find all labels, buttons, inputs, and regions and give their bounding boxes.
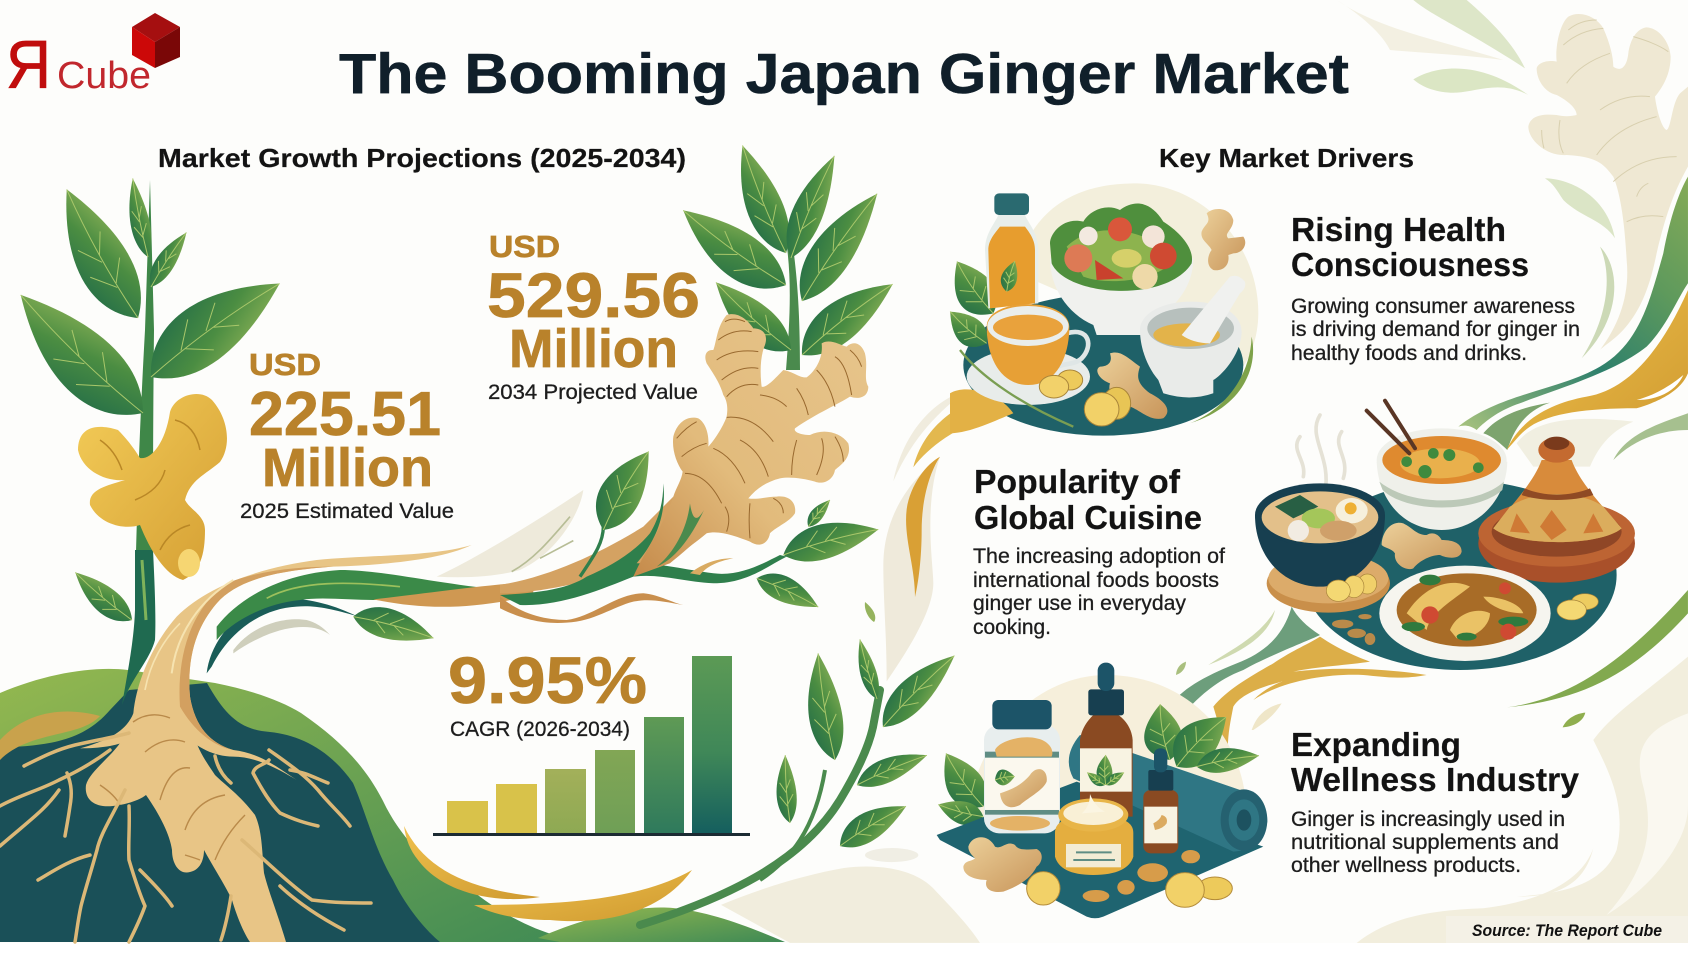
illustration: right plant with tan ginger [437,140,903,623]
illustration: tuber and roots [0,715,371,942]
text block: expanding wellness industry [1291,726,1580,877]
icon: supplement jar [984,700,1060,833]
icon: tea cup [987,304,1088,385]
stat: CAGR: 9.95% [448,643,647,717]
icon: ginger [1382,523,1462,569]
stat: 2025 estimated value: USD [249,347,321,382]
saucer [967,348,1090,405]
plate base [1303,480,1617,670]
text block: rising health consciousness: is driving demand for ginger in [1291,318,1580,341]
text block: expanding wellness industry: Ginger is increasingly used in [1291,808,1565,831]
gold ribbon [1507,290,1688,450]
logo: RCube [6,13,180,103]
text block: popularity of global cuisine: cooking. [973,616,1051,639]
source note: Source: The Report Cube [1472,921,1662,940]
text block: rising health consciousness: Growing consumer awareness [1291,295,1575,318]
icon: salad bowl [1050,204,1193,335]
icon: gold ginger root [78,394,227,580]
stat: 2034 projected value: USD [489,229,560,264]
icon: ginger slices [1039,370,1083,398]
icon: cream jar [1055,794,1133,875]
icon: dropper bottle [1080,663,1133,817]
roots [0,733,371,942]
leaves [939,252,1007,326]
icon: juice bottle [985,193,1038,308]
logo: RCube: Cube [57,55,151,97]
icon: wooden board [1267,554,1390,613]
icon: ginger pile [963,837,1232,907]
icon: main ginger tuber [86,735,286,942]
text block: expanding wellness industry: Expanding [1291,726,1461,763]
illustration: vine with leaves [640,602,964,925]
text block: popularity of global cuisine: Popularity of [974,463,1181,500]
pale strokes [437,490,583,577]
background swirls: cream and gold ribbon near global cuisine [721,390,1000,943]
text block: expanding wellness industry: Wellness Industry [1291,761,1580,798]
icon: pale ginger silhouette [1528,14,1688,350]
icon: ramen bowl [1255,483,1385,587]
stat: 2034 projected value: 529.56 [487,261,700,331]
icon: tagine [1478,437,1635,583]
text block: popularity of global cuisine: The increasing adoption of [973,545,1225,568]
text block: rising health consciousness: Rising Health [1291,211,1506,248]
text block: rising health consciousness [1291,211,1580,365]
branches [500,497,707,593]
stat: 2034 projected value: 2034 Projected Value [488,381,698,404]
heading: key market drivers: Key Market Drivers [1159,143,1414,173]
logo: RCube: Я [6,27,51,103]
icon: yoga mat roll [1069,735,1267,852]
mat [937,782,1263,918]
title: The Booming Japan Ginger Market [339,42,1349,106]
icon: ginger slices [1326,574,1598,620]
illustration: left plant with gold ginger [0,177,295,705]
text block: rising health consciousness: healthy foods and drinks. [1291,342,1527,365]
icon: curry bowl [1377,428,1507,530]
illustration: wellness products [929,663,1267,918]
text block: popularity of global cuisine: ginger use in everyday [973,592,1186,615]
stat: 2025 estimated value: 225.51 [249,380,441,449]
background swirls: top right with pale ginger and ribbons [1337,0,1688,467]
text block: popularity of global cuisine [973,463,1225,639]
illustration: global cuisine [1255,401,1635,670]
stat: 2034 projected value: Million [509,319,678,379]
ribbon under cuisine plate [1170,607,1320,707]
plate [963,294,1243,436]
stat: 2025 estimated value [240,347,454,523]
trunk [133,545,472,780]
icon: small dropper bottle [1143,748,1178,853]
text block: expanding wellness industry: other wellness products. [1291,854,1521,877]
icon: seeds [1083,850,1200,902]
icon: leaves [929,701,1261,829]
icon: small ginger [1201,209,1245,270]
lower tan branch [373,582,533,607]
icon: steam [1297,415,1345,492]
small green accents [657,503,704,567]
bar chart: CAGR growth [433,656,750,836]
illustration: gold swooshes [404,826,692,921]
icon: red cube [132,13,180,68]
illustration: trunk and branch [80,545,533,780]
stat: 2034 projected value [487,229,700,404]
text block: popularity of global cuisine: Global Cuisine [974,499,1202,536]
illustration: health foods [939,183,1258,436]
icon: seeds [1332,614,1375,645]
text block: popularity of global cuisine: international foods boosts [973,569,1219,592]
text block: rising health consciousness: Consciousness [1291,246,1529,283]
heading: market growth projections: Market Growth Projections (2025-2034) [158,143,686,173]
icon: tan ginger root [633,314,868,577]
icon: ginger on plate [1084,352,1167,426]
stat: 2025 estimated value: 2025 Estimated Value [240,500,454,523]
green ribbon [1458,177,1688,430]
background swirls: bottom right cream [1170,590,1688,943]
icon: chopsticks [1367,401,1415,453]
icon: mortar and pestle [1140,276,1245,397]
stat: CAGR: CAGR (2026-2034) [450,718,630,741]
icon: stir fry plate [1379,566,1551,661]
illustration: soil mound [0,669,785,942]
source note [1446,916,1688,943]
text block: expanding wellness industry: nutritional supplements and [1291,831,1559,854]
stat: 2025 estimated value: Million [262,438,433,498]
